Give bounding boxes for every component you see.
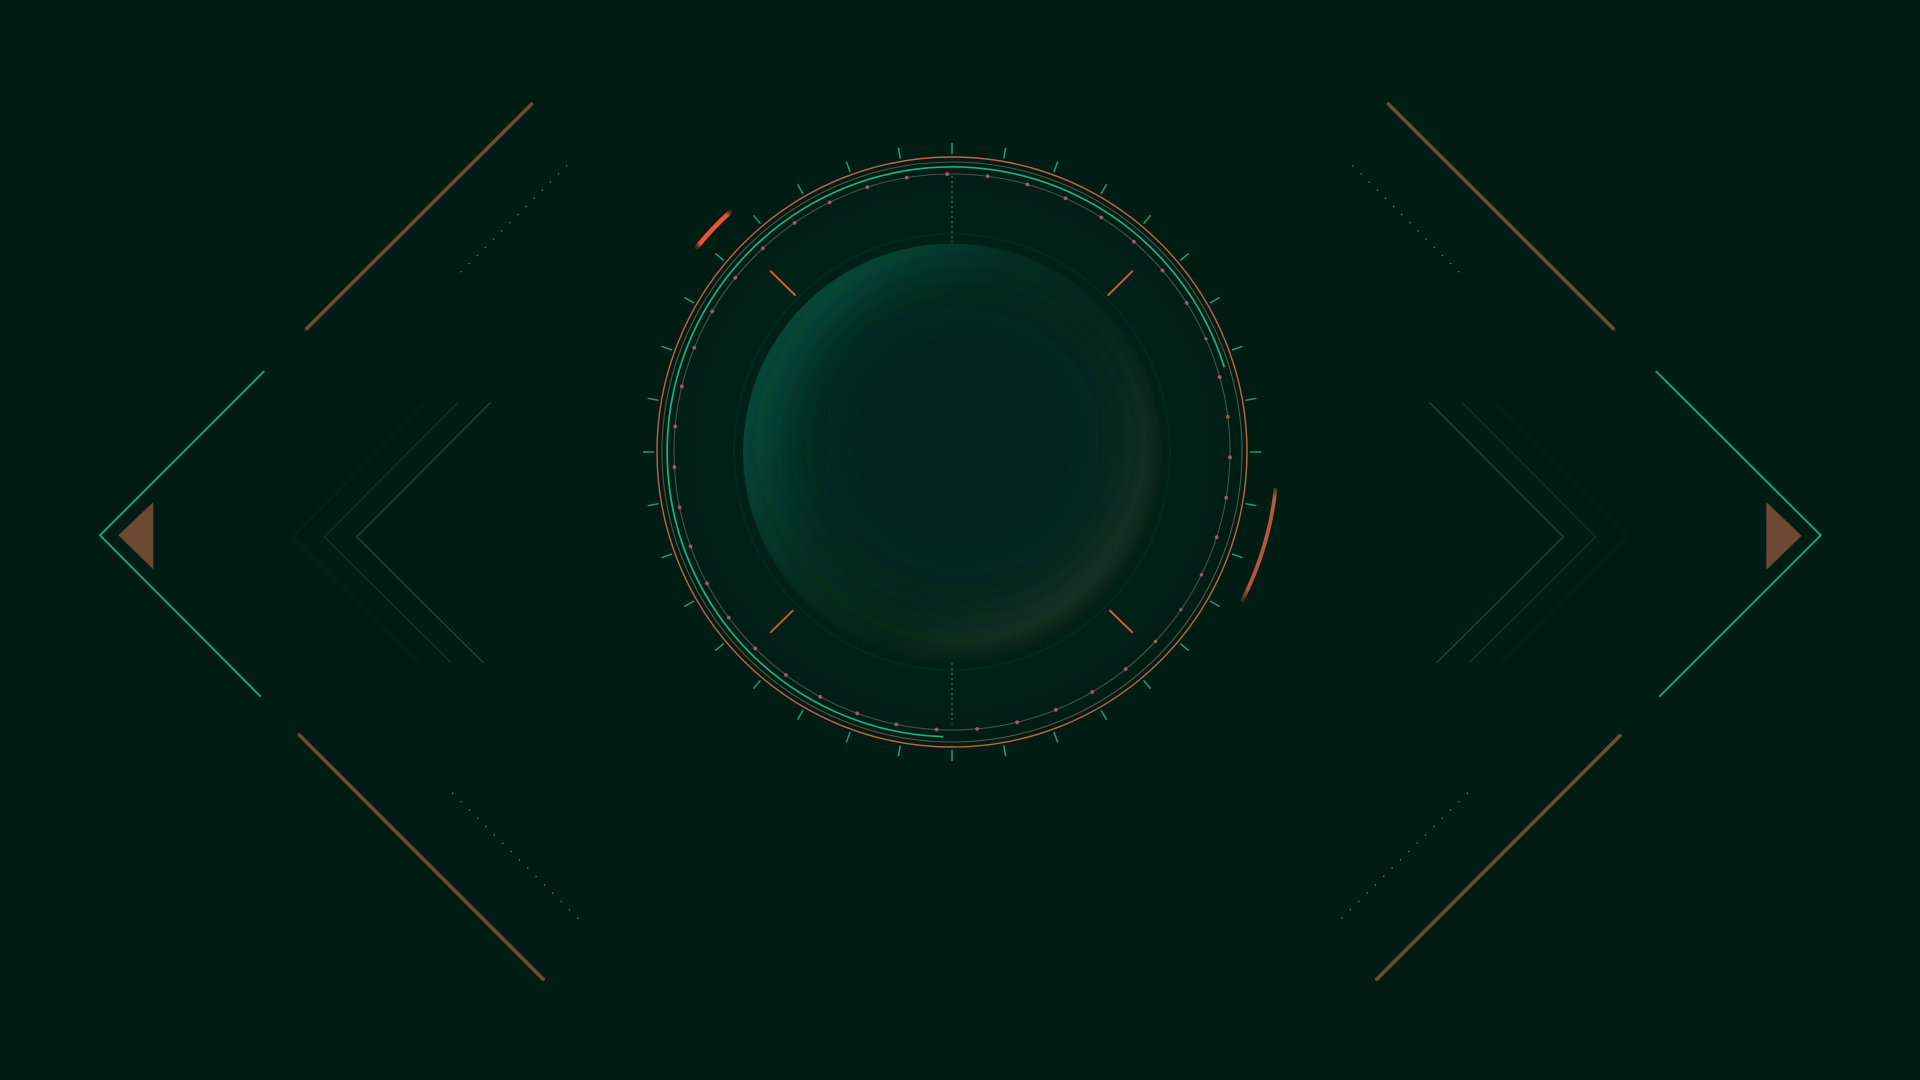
orange arc right	[1242, 488, 1276, 602]
central sphere	[743, 244, 1161, 662]
right outer chevron	[1656, 371, 1821, 697]
left inner chevrons	[293, 402, 491, 663]
red crosshair marks	[771, 271, 1132, 632]
inner halo disc	[667, 167, 1237, 737]
ring system	[657, 157, 1247, 747]
left outer chevron	[100, 371, 264, 697]
faint sphere outline	[734, 234, 1170, 670]
dotted diagonal lines	[453, 166, 1467, 919]
brown diagonal lines	[299, 104, 1620, 979]
ring dots	[672, 172, 1232, 732]
red arc upper left	[697, 212, 730, 247]
HUD scene	[98, 102, 1822, 982]
right triangle marker	[1766, 502, 1802, 570]
ring tick marks	[643, 143, 1261, 761]
left triangle marker	[118, 502, 153, 569]
vertical dotted axis	[951, 176, 953, 724]
right inner chevrons	[1429, 402, 1628, 663]
